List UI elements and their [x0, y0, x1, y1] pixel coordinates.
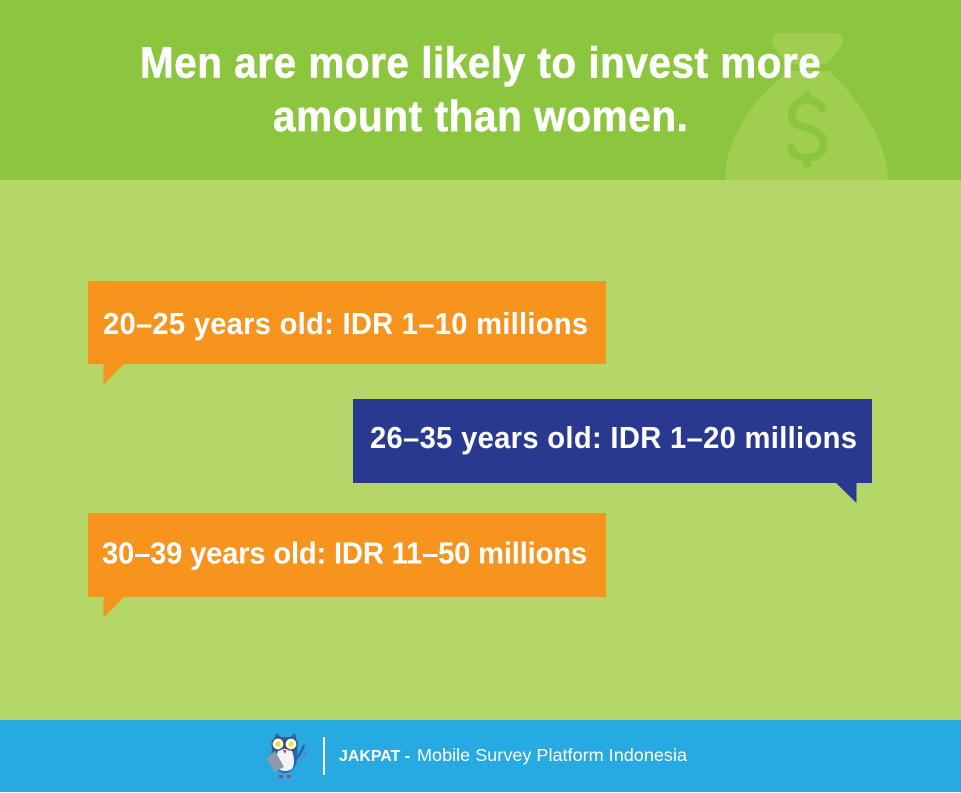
panel: header band: [0, 0, 961, 180]
title: amount than women.: [273, 91, 688, 140]
panel: footer band: [0, 720, 961, 792]
icon: money bag: [725, 33, 888, 180]
panel: main background: [0, 180, 961, 720]
callout: 20-25 years old: 20–25 years old: IDR 1–10 millions: [103, 307, 588, 341]
callout: 20-25 years old: [88, 281, 606, 385]
callout: 26-35 years old: 26–35 years old: IDR 1–20 millions: [370, 421, 857, 455]
footer text: JAKPAT -: [339, 748, 410, 765]
callout: 30-39 years old: [88, 513, 606, 618]
callout: 26-35 years old: [353, 399, 872, 503]
title: [140, 38, 821, 140]
title: Men are more likely to invest more: [140, 38, 821, 87]
icon: owl mascot: [266, 733, 306, 778]
divider: [323, 737, 325, 775]
callout: 30-39 years old: 30–39 years old: IDR 11–50 millions: [102, 537, 587, 571]
footer text: Mobile Survey Platform Indonesia: [417, 745, 687, 765]
